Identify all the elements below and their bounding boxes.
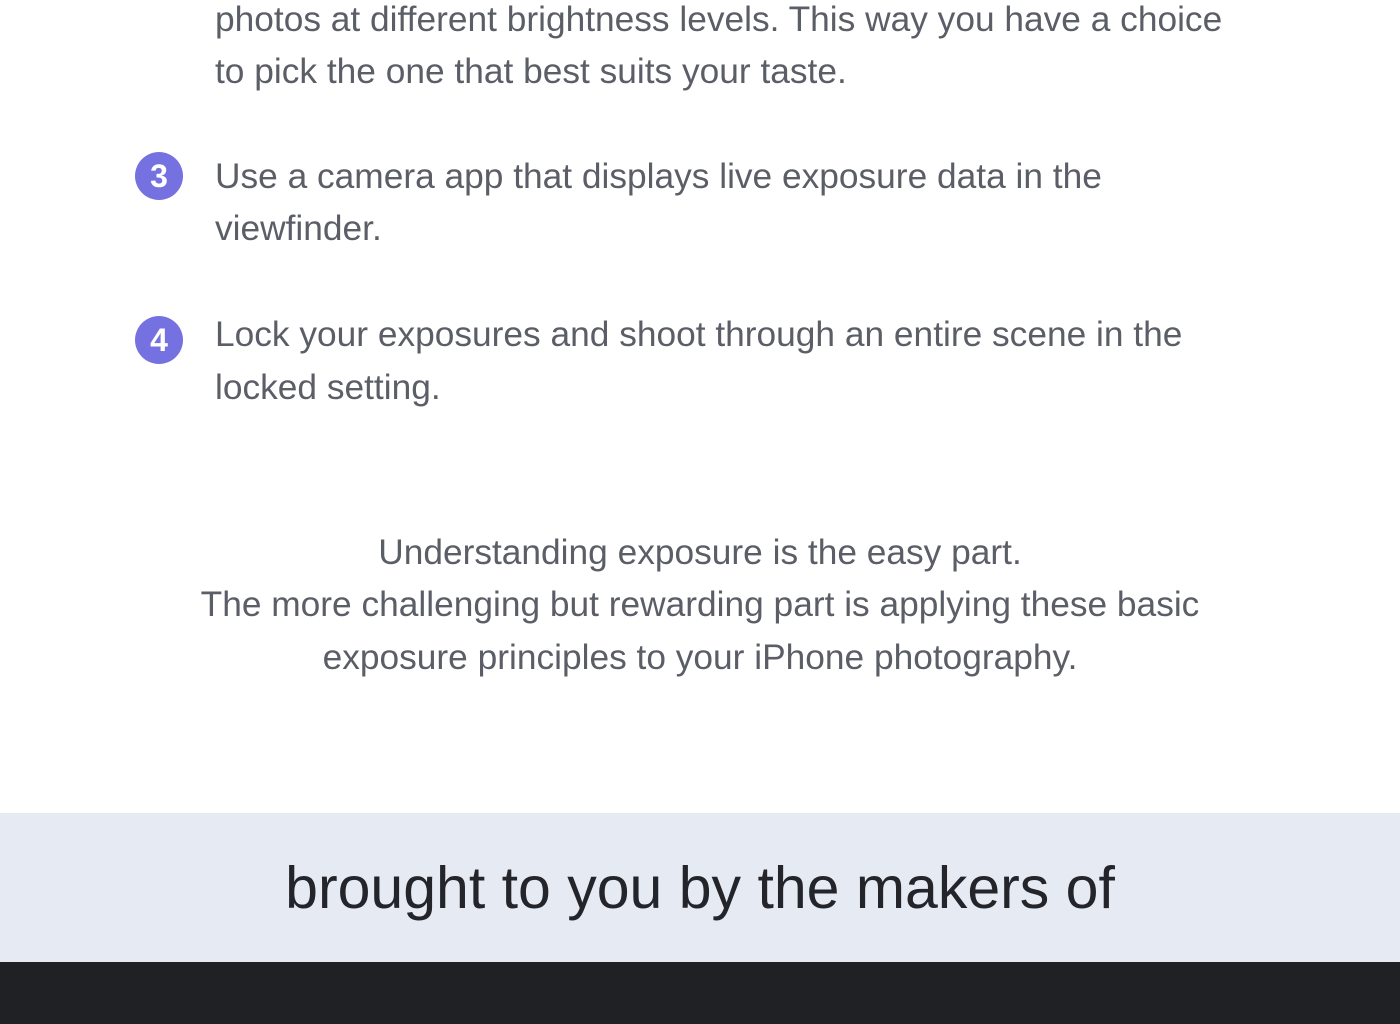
- closing statement: The more challenging but rewarding part is applying these basic: [201, 585, 1199, 624]
- footer band: brought to you by: [0, 813, 1400, 962]
- footer heading: brought to you by the makers of: [285, 855, 1115, 921]
- text: step 4: locked setting.: [215, 368, 441, 407]
- icon: number 4: 4: [150, 322, 168, 358]
- text: step 3: Use a camera app that displays live exposure data in the: [215, 157, 1102, 196]
- dark footer bar: [0, 962, 1400, 1024]
- text block: step 2 continuation: [215, 0, 1222, 91]
- closing statement: [201, 533, 1199, 677]
- icon: number 3: [135, 152, 183, 200]
- closing statement: Understanding exposure is the easy part.: [378, 533, 1022, 572]
- text: step 4: Lock your exposures and shoot through an entire scene in the: [215, 315, 1182, 354]
- text: step 3: [215, 157, 1102, 248]
- text: step 4: [215, 315, 1182, 407]
- icon: number 3: 3: [150, 158, 168, 194]
- text block: step 2 continuation: to pick the one that best suits your taste.: [215, 52, 847, 91]
- step 3: [135, 152, 1102, 248]
- text block: step 2 continuation: photos at different brightness levels. This way you have a choice: [215, 0, 1222, 39]
- step 4: [135, 315, 1182, 407]
- text: step 3: viewfinder.: [215, 209, 382, 248]
- closing statement: exposure principles to your iPhone photography.: [323, 638, 1077, 677]
- icon: number 4: [135, 316, 183, 364]
